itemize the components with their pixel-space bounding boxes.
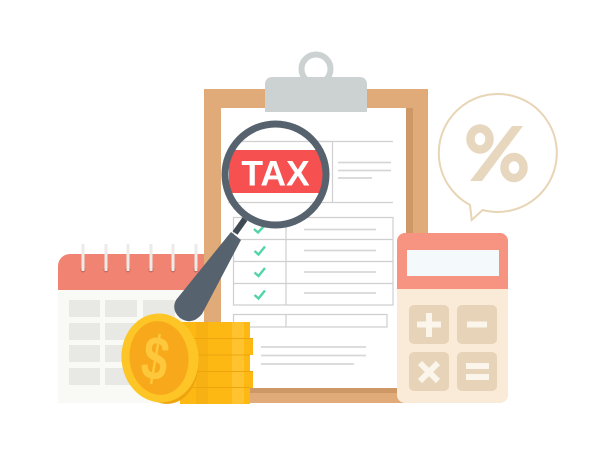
form text lines <box>261 347 366 364</box>
coin stack <box>117 310 253 407</box>
calendar header <box>58 254 204 290</box>
calendar <box>58 244 204 403</box>
dollar sign: $ <box>137 321 174 395</box>
clip <box>265 54 367 112</box>
form header lines <box>240 141 393 202</box>
checklist table <box>234 218 393 305</box>
button symbols <box>417 313 489 381</box>
clipboard board <box>204 89 428 403</box>
TAX label: TAX <box>241 154 310 194</box>
calculator buttons <box>409 305 497 391</box>
board shadow <box>221 108 413 393</box>
second form row <box>234 314 387 327</box>
magnifier handle <box>174 219 245 321</box>
magnifier lens <box>226 124 326 224</box>
calculator <box>397 233 508 403</box>
ring holes <box>80 268 198 272</box>
calendar rings <box>83 244 196 271</box>
magnifying glass <box>174 124 331 321</box>
lens contents <box>228 142 331 202</box>
stacked coins <box>180 322 253 404</box>
calendar date cells <box>69 300 175 385</box>
magnifier ring <box>225 124 326 225</box>
percent sign <box>470 128 524 178</box>
clipboard <box>204 54 428 403</box>
check marks <box>254 226 265 298</box>
calendar body <box>58 290 204 403</box>
paper sheet <box>221 108 406 388</box>
calculator body <box>397 233 508 403</box>
percent speech bubble <box>439 94 557 220</box>
calculator top <box>397 233 508 289</box>
calculator screen <box>407 250 499 276</box>
